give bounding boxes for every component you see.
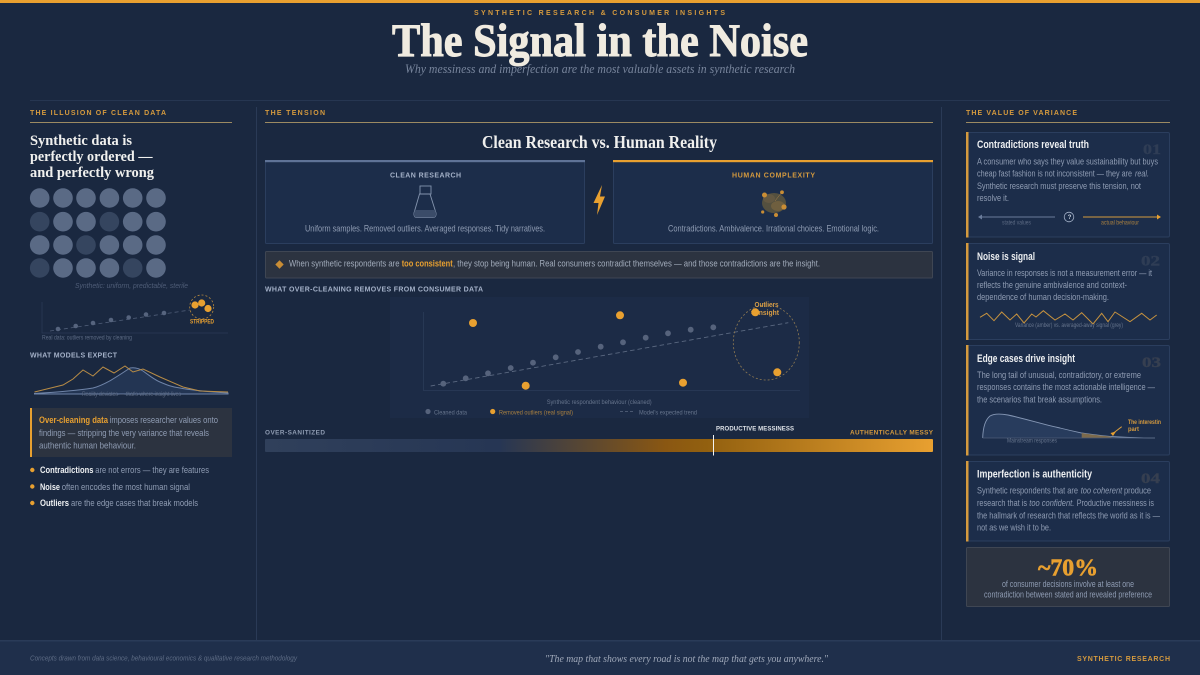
panel: the illusion of clean data — [30, 110, 232, 508]
title: The Signal in the Noise — [392, 15, 808, 67]
card 04: imperfection is authenticity: not as we wish it to be. — [977, 522, 1051, 532]
card: human complexity: HUMAN COMPLEXITY — [732, 172, 815, 180]
panel headline: and perfectly wrong — [30, 165, 154, 181]
chart: noisy signal: Variance (amber) vs. averaged-away signal (grey) — [1015, 322, 1123, 329]
footer source note: Concepts drawn from data science, behavioural economics & qualitative research methodology — [30, 654, 297, 662]
footer brand: SYNTHETIC RESEARCH — [1077, 656, 1170, 663]
chart: long tail distribution — [983, 414, 1161, 444]
panel headline: perfectly ordered — — [30, 149, 153, 165]
icon: diamond — [275, 260, 284, 269]
comparison heading: Clean Research vs. Human Reality — [482, 132, 717, 152]
x-axis label: Synthetic respondent behaviour (cleaned) — [547, 399, 652, 406]
spectrum scale: AUTHENTICALLY MESSY — [850, 430, 934, 436]
card 01: contradictions reveal truth: Contradictions reveal truth — [977, 139, 1089, 151]
callout: over-cleaning data: imposes researcher values onto — [110, 415, 218, 425]
callout: too consistent: When synthetic respondents are — [289, 258, 400, 268]
card 01: contradictions reveal truth: real. — [1135, 168, 1149, 178]
diagram: stated values vs actual behaviour: actual behaviour — [1101, 220, 1139, 226]
card 04: imperfection is authenticity: research that is — [977, 498, 1027, 508]
footer quote: "The map that shows every road is not the map that gets you anywhere." — [545, 654, 829, 665]
chart: long tail distribution: The interestin — [1128, 420, 1161, 426]
label: what over-cleaning removes: WHAT OVER-CLEANING REMOVES FROM CONSUMER DATA — [265, 286, 483, 294]
outlier points — [469, 308, 781, 390]
card 04: imperfection is authenticity: too coherent — [1081, 486, 1123, 496]
callout: too consistent — [266, 252, 932, 278]
chart: noisy signal — [980, 311, 1157, 329]
trend line — [431, 323, 788, 386]
panel headline: Synthetic data is — [30, 133, 132, 149]
dot grid caption: Synthetic: uniform, predictable, sterile — [75, 281, 188, 290]
curve chart: expected bell vs real signal: Reality deviates — that's where insight lives — [82, 391, 181, 398]
card 02: noise is signal — [966, 243, 1170, 340]
card 02: noise is signal: 02 — [1141, 254, 1160, 270]
diagram: stated values vs actual behaviour — [978, 212, 1161, 226]
callout: over-cleaning data — [30, 408, 232, 457]
bullet list: Contradictions — [40, 465, 94, 475]
outlier label: = insight — [751, 310, 780, 317]
bullet list: are not errors — they are features — [95, 465, 209, 475]
card 04: imperfection is authenticity: produce — [1124, 486, 1151, 496]
card: clean research: CLEAN RESEARCH — [390, 172, 461, 180]
stat callout: ~70%: contradiction between stated and revealed preference — [984, 590, 1152, 600]
section heading: THE VALUE OF VARIANCE — [966, 110, 1077, 117]
card: clean research — [265, 160, 585, 244]
card 03: edge cases drive insight: The long tail of unusual, contradictory, or extreme — [977, 370, 1141, 380]
icon: flask — [414, 186, 436, 218]
card 01: contradictions reveal truth — [966, 132, 1170, 238]
chart: long tail distribution: part — [1128, 427, 1139, 433]
bullet list: often encodes the most human signal — [62, 482, 190, 492]
card: clean research: Uniform samples. Removed outliers. Averaged responses. Tidy narratives. — [305, 224, 545, 234]
card 03: edge cases drive insight: Edge cases drive insight — [977, 353, 1075, 365]
outlier ring — [733, 305, 799, 380]
subtitle: Why messiness and imperfection are the most valuable assets in synthetic research — [405, 62, 795, 76]
curve chart: expected bell vs real signal — [34, 366, 228, 398]
card: human complexity — [613, 160, 933, 244]
panel: the value of variance — [966, 110, 1170, 606]
legend: Removed outliers (real signal) — [499, 410, 573, 416]
stat callout: ~70%: ~70% — [1038, 556, 1098, 582]
eyebrow: SYNTHETIC RESEARCH & CONSUMER INSIGHTS — [474, 10, 725, 17]
diagram: stated values vs actual behaviour: ? — [1068, 215, 1072, 221]
card 03: edge cases drive insight: the scenarios that break assumptions. — [977, 394, 1102, 404]
legend — [425, 409, 697, 416]
spectrum scale — [265, 426, 934, 456]
card 02: noise is signal: reflects the genuine ambivalence and context- — [977, 280, 1127, 290]
legend: Cleaned data — [434, 410, 467, 416]
callout: too consistent: , they stop being human. Real consumers contradict themselves — and those contradictions are the insight. — [453, 258, 820, 268]
card 04: imperfection is authenticity — [966, 461, 1170, 542]
card 04: imperfection is authenticity: too confident. — [1029, 498, 1074, 508]
stat callout: ~70% — [966, 548, 1170, 606]
label: what models expect: WHAT MODELS EXPECT — [30, 352, 118, 360]
card 01: contradictions reveal truth: Synthetic research must preserve this tension, not — [977, 181, 1141, 191]
bullet list: Noise — [40, 482, 60, 492]
section heading: THE ILLUSION OF CLEAN DATA — [30, 110, 166, 117]
panel headline — [30, 133, 154, 181]
callout: too consistent: too consistent — [402, 258, 453, 268]
stat callout: ~70%: of consumer decisions involve at least one — [1002, 579, 1134, 589]
icon: messy cluster — [761, 190, 787, 217]
card 03: edge cases drive insight: 03 — [1142, 355, 1161, 371]
card 02: noise is signal: Variance in responses is not a measurement error — it — [977, 268, 1152, 278]
bullet list: Outliers — [40, 498, 69, 508]
callout: over-cleaning data: Over-cleaning data — [39, 415, 109, 425]
dot grid: uniform synthetic data — [30, 188, 166, 278]
mini scatter: outliers stripped: STRIPPED — [190, 320, 215, 326]
diagram: stated values vs actual behaviour: stated values — [1002, 220, 1031, 226]
card 04: imperfection is authenticity: Synthetic respondents that are — [977, 486, 1078, 496]
legend: Model's expected trend — [639, 410, 697, 416]
bullet list: are the edge cases that break models — [71, 498, 198, 508]
callout: over-cleaning data: authentic human behaviour. — [39, 440, 136, 450]
card 02: noise is signal: dependence of human decision-making. — [977, 292, 1109, 302]
footer — [0, 640, 1200, 675]
card 03: edge cases drive insight — [966, 345, 1170, 456]
section heading: THE TENSION — [265, 110, 325, 117]
card 04: imperfection is authenticity: the hallmark of research that reflects the world as it is — — [977, 510, 1161, 520]
outlier label — [751, 302, 780, 317]
bullet list — [30, 465, 209, 508]
spectrum scale: PRODUCTIVE MESSINESS — [716, 426, 794, 432]
card 02: noise is signal: Noise is signal — [977, 251, 1035, 263]
scatter chart: over-cleaning — [390, 297, 809, 418]
card 01: contradictions reveal truth: 01 — [1143, 142, 1161, 158]
card 03: edge cases drive insight: responses contains the most actionable intelligence — — [977, 382, 1156, 392]
chart: long tail distribution: Mainstream responses — [1007, 438, 1057, 444]
card 04: imperfection is authenticity: Imperfection is authenticity — [977, 468, 1092, 480]
icon: lightning bolt — [594, 185, 605, 215]
callout: over-cleaning data: findings — stripping the very variance that reveals — [39, 428, 209, 438]
outlier label: Outliers — [754, 302, 779, 309]
spectrum scale: OVER-SANITIZED — [265, 430, 325, 436]
card 01: contradictions reveal truth: resolve it. — [977, 193, 1009, 203]
mini scatter: outliers stripped: Real data: outliers removed by cleaning — [42, 334, 132, 342]
header — [392, 10, 808, 76]
panel: the tension — [265, 110, 934, 456]
mini scatter: outliers stripped — [42, 295, 228, 342]
cleaned data points — [440, 324, 716, 387]
card 04: imperfection is authenticity: Productive messiness is — [1077, 498, 1154, 508]
card 04: imperfection is authenticity: 04 — [1141, 471, 1161, 487]
card 01: contradictions reveal truth: cheap fast fashion is not inconsistent — they are — [977, 168, 1132, 178]
card 01: contradictions reveal truth: A consumer who says they value sustainability but buys — [977, 156, 1158, 166]
card: human complexity: Contradictions. Ambivalence. Irrational choices. Emotional logic. — [668, 224, 879, 234]
